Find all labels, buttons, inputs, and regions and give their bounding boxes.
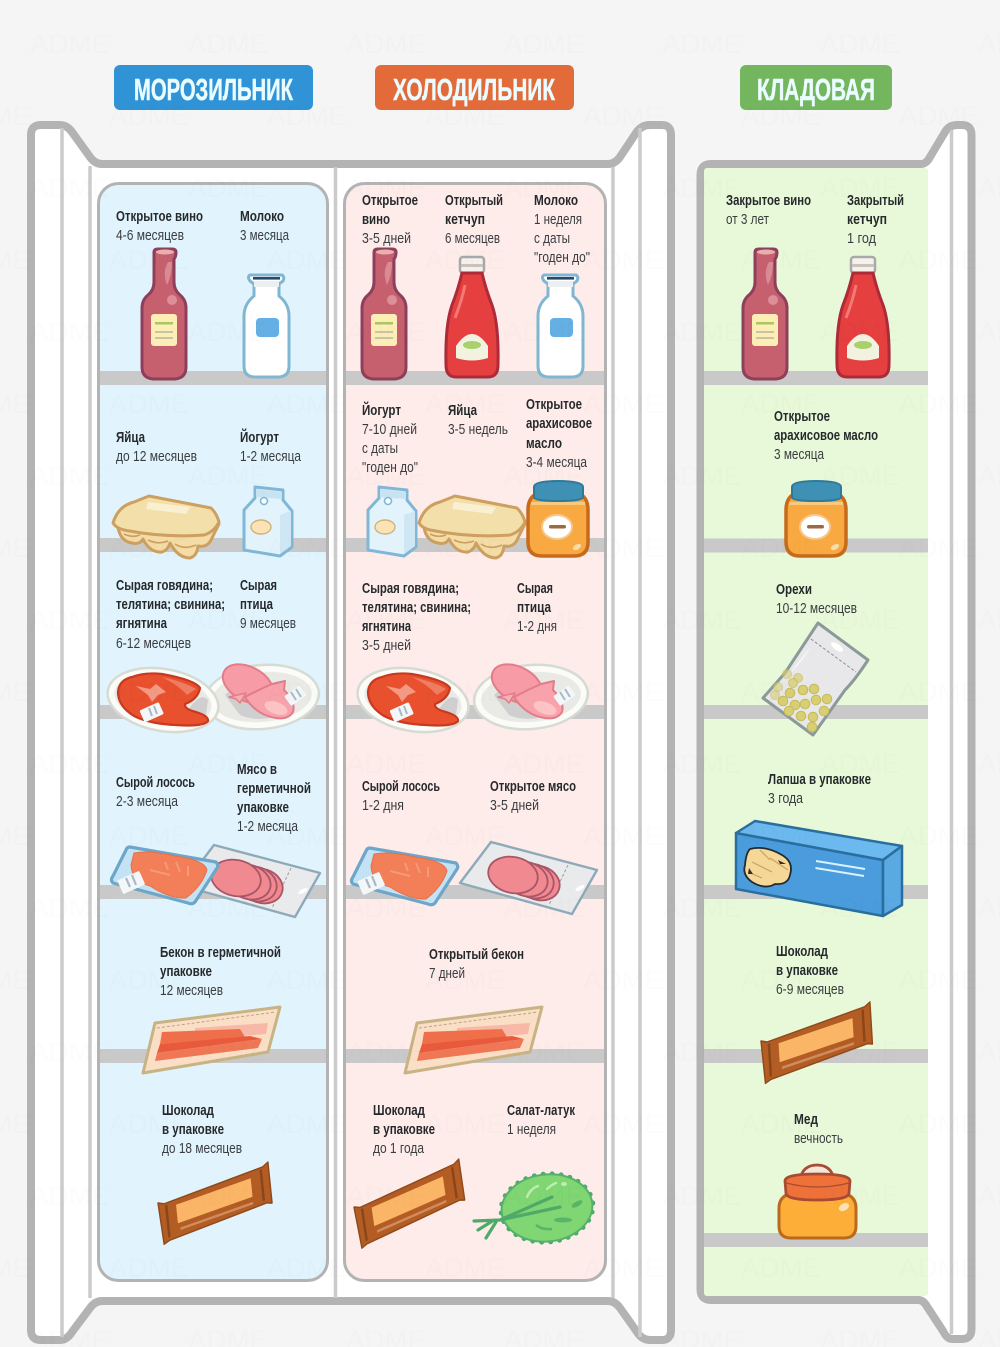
text: open peanut butter fridge: Открытое xyxy=(526,397,582,413)
text: chocolate fridge: в упаковке xyxy=(373,1122,435,1138)
text: chocolate pantry: Шоколад xyxy=(776,944,828,960)
text: noodles pantry: Лапша в упаковке xyxy=(768,772,871,788)
icon: poultry plate xyxy=(202,656,322,734)
text: raw beef freezer: Сырая говядина; xyxy=(116,578,213,594)
text: chocolate fridge xyxy=(373,1103,435,1157)
text: lettuce fridge: 1 неделя xyxy=(507,1122,556,1138)
icon: poultry plate xyxy=(471,656,591,734)
text: salmon fridge: Сырой лосось xyxy=(362,779,440,795)
text: noodles pantry: 3 года xyxy=(768,791,804,807)
text: sealed meat freezer xyxy=(237,762,311,835)
pantry body with door xyxy=(700,125,972,1339)
text: raw beef fridge: 3-5 дней xyxy=(362,638,411,654)
text: yogurt fridge xyxy=(362,401,418,476)
text: honey pantry: вечность xyxy=(794,1131,843,1147)
text: sealed meat freezer: упаковке xyxy=(237,800,289,816)
text: open ketchup fridge: кетчуп xyxy=(445,212,485,228)
text: open ketchup fridge: Открытый xyxy=(445,193,503,209)
text: open peanut butter fridge xyxy=(526,397,592,471)
icon: peanut butter jar xyxy=(528,481,588,556)
text: open meat fridge: 3-5 дней xyxy=(490,798,539,814)
text: raw poultry fridge xyxy=(517,581,557,635)
icon: milk bottle xyxy=(538,275,583,377)
text: yogurt fridge: Йогурт xyxy=(362,401,401,419)
text: raw beef fridge: телятина; свинина; xyxy=(362,600,471,616)
icon: egg carton xyxy=(113,496,219,558)
header: freezer xyxy=(114,65,313,110)
text: yogurt fridge: с даты xyxy=(362,441,398,457)
text: raw poultry freezer: птица xyxy=(240,597,274,613)
text: open peanut butter pantry: Открытое xyxy=(774,409,830,425)
text: open bacon fridge: 7 дней xyxy=(429,966,465,982)
text: sealed meat freezer: 1-2 месяца xyxy=(237,819,299,835)
text: raw beef freezer xyxy=(116,578,225,652)
header: fridge: ХОЛОДИЛЬНИК xyxy=(393,72,555,107)
text: milk fridge: 1 неделя xyxy=(534,212,582,228)
text: open ketchup fridge xyxy=(445,193,503,247)
text: open bacon fridge xyxy=(429,947,524,982)
text: milk freezer xyxy=(240,209,290,244)
icon: yogurt carton xyxy=(368,487,416,556)
text: raw poultry freezer xyxy=(240,578,296,632)
text: raw beef freezer: ягнятина xyxy=(116,616,168,632)
text: raw beef fridge xyxy=(362,581,471,654)
icon: milk bottle xyxy=(244,275,289,377)
text: chocolate fridge: Шоколад xyxy=(373,1103,425,1119)
text: eggs fridge: 3-5 недель xyxy=(448,422,508,438)
text: closed wine pantry: от 3 лет xyxy=(726,212,769,228)
text: salmon freezer: Сырой лосось xyxy=(116,775,195,791)
icon: bacon pack xyxy=(405,1007,542,1073)
text: milk freezer: 3 месяца xyxy=(240,228,290,244)
text: raw poultry fridge: птица xyxy=(517,600,552,616)
text: raw beef freezer: 6-12 месяцев xyxy=(116,636,191,652)
icon: ketchup bottle xyxy=(446,257,498,377)
text: milk fridge xyxy=(534,193,590,266)
text: yogurt freezer: 1-2 месяца xyxy=(240,449,302,465)
text: yogurt freezer: Йогурт xyxy=(240,428,279,446)
text: salmon fridge: 1-2 дня xyxy=(362,798,404,814)
text: milk fridge: с даты xyxy=(534,231,570,247)
icon: chocolate bar xyxy=(158,1162,272,1245)
icon: wine bottle xyxy=(743,249,787,379)
text: open wine freezer xyxy=(116,209,203,244)
text: open meat fridge: Открытое мясо xyxy=(490,779,576,795)
text: nuts pantry: Орехи xyxy=(776,582,812,598)
text: open peanut butter fridge: 3-4 месяца xyxy=(526,455,588,471)
icon: peanut butter jar xyxy=(786,481,846,556)
text: open meat fridge xyxy=(490,779,576,814)
text: eggs freezer: Яйца xyxy=(116,430,146,446)
text: raw poultry freezer: 9 месяцев xyxy=(240,616,296,632)
icon: egg carton xyxy=(419,496,525,558)
icon: sausage tray xyxy=(460,842,597,914)
text: open peanut butter pantry: арахисовое масло xyxy=(774,428,878,444)
header: pantry xyxy=(740,65,892,110)
panel: freezer xyxy=(98,184,328,1280)
text: raw poultry freezer: Сырая xyxy=(240,578,277,594)
icon: noodle box xyxy=(736,821,902,916)
text: open peanut butter fridge: арахисовое xyxy=(526,416,592,432)
icon: salmon tray xyxy=(112,847,218,904)
text: eggs fridge: Яйца xyxy=(448,403,478,419)
icon: salmon tray xyxy=(352,848,458,905)
icon: yogurt carton xyxy=(244,487,292,556)
icon: wine bottle xyxy=(142,249,186,379)
text: open wine fridge: вино xyxy=(362,212,390,228)
icon: chocolate bar xyxy=(761,1002,873,1084)
text: salmon freezer: 2-3 месяца xyxy=(116,794,179,810)
icon: steak plate xyxy=(102,660,224,740)
text: raw poultry fridge: Сырая xyxy=(517,581,553,597)
text: chocolate pantry xyxy=(776,944,844,998)
text: raw poultry fridge: 1-2 дня xyxy=(517,619,557,635)
text: eggs freezer xyxy=(116,430,197,465)
text: raw beef fridge: ягнятина xyxy=(362,619,412,635)
text: chocolate freezer xyxy=(162,1103,242,1157)
text: open ketchup fridge: 6 месяцев xyxy=(445,231,500,247)
text: closed ketchup pantry: Закрытый xyxy=(847,193,904,209)
text: honey pantry: Мед xyxy=(794,1112,818,1128)
text: raw beef freezer: телятина; свинина; xyxy=(116,597,225,613)
text: yogurt freezer xyxy=(240,428,302,465)
icon: ketchup bottle xyxy=(837,257,889,377)
text: raw beef fridge: Сырая говядина; xyxy=(362,581,459,597)
text: open peanut butter pantry xyxy=(774,409,878,463)
text: open wine freezer: Открытое вино xyxy=(116,209,203,225)
text: closed ketchup pantry: кетчуп xyxy=(847,212,887,228)
text: sealed bacon freezer: упаковке xyxy=(160,964,212,980)
text: closed wine pantry xyxy=(726,193,811,228)
icon: honey jar xyxy=(779,1165,856,1238)
text: open bacon fridge: Открытый бекон xyxy=(429,947,524,963)
text: yogurt fridge: 7-10 дней xyxy=(362,422,417,438)
text: eggs freezer: до 12 месяцев xyxy=(116,449,197,465)
text: noodles pantry xyxy=(768,772,871,807)
text: sealed bacon freezer xyxy=(160,945,281,999)
text: open wine fridge: Открытое xyxy=(362,193,418,209)
text: nuts pantry xyxy=(776,582,857,617)
text: chocolate pantry: 6-9 месяцев xyxy=(776,982,844,998)
header: fridge xyxy=(375,65,574,110)
icon: bag of nuts xyxy=(763,623,868,735)
text: sealed meat freezer: Мясо в xyxy=(237,762,277,778)
text: chocolate pantry: в упаковке xyxy=(776,963,838,979)
panel: fridge xyxy=(344,184,606,1280)
text: closed ketchup pantry xyxy=(847,193,904,247)
icon: chocolate bar xyxy=(354,1159,465,1249)
icon: bacon pack xyxy=(143,1007,280,1073)
header: pantry: КЛАДОВАЯ xyxy=(757,72,875,107)
text: milk fridge: "годен до" xyxy=(534,250,590,266)
text: open peanut butter pantry: 3 месяца xyxy=(774,447,825,463)
icon: wine bottle xyxy=(362,249,406,379)
text: chocolate freezer: до 18 месяцев xyxy=(162,1141,242,1157)
header: freezer: МОРОЗИЛЬНИК xyxy=(134,72,293,107)
text: open peanut butter fridge: масло xyxy=(526,436,562,452)
text: closed ketchup pantry: 1 год xyxy=(847,231,876,247)
text: open wine fridge: 3-5 дней xyxy=(362,231,411,247)
text: salmon freezer xyxy=(116,775,195,810)
text: chocolate fridge: до 1 года xyxy=(373,1141,425,1157)
text: yogurt fridge: "годен до" xyxy=(362,460,418,476)
text: lettuce fridge xyxy=(507,1103,576,1138)
text: salmon fridge xyxy=(362,779,440,814)
text: lettuce fridge: Салат-латук xyxy=(507,1103,576,1119)
icon: lettuce xyxy=(474,1169,596,1247)
text: milk freezer: Молоко xyxy=(240,209,284,225)
text: chocolate freezer: Шоколад xyxy=(162,1103,214,1119)
text: closed wine pantry: Закрытое вино xyxy=(726,193,811,209)
text: open wine freezer: 4-6 месяцев xyxy=(116,228,184,244)
fridge body with doors xyxy=(31,125,671,1340)
text: sealed bacon freezer: Бекон в герметичной xyxy=(160,945,281,961)
text: milk fridge: Молоко xyxy=(534,193,578,209)
text: sealed bacon freezer: 12 месяцев xyxy=(160,983,223,999)
text: sealed meat freezer: герметичной xyxy=(237,781,311,797)
text: honey pantry xyxy=(794,1112,843,1147)
icon: steak plate xyxy=(352,660,474,740)
text: open wine fridge xyxy=(362,193,418,247)
text: eggs fridge xyxy=(448,403,508,438)
panel: pantry xyxy=(704,168,928,1296)
icon: sausage tray xyxy=(183,845,320,917)
text: nuts pantry: 10-12 месяцев xyxy=(776,601,857,617)
text: chocolate freezer: в упаковке xyxy=(162,1122,224,1138)
